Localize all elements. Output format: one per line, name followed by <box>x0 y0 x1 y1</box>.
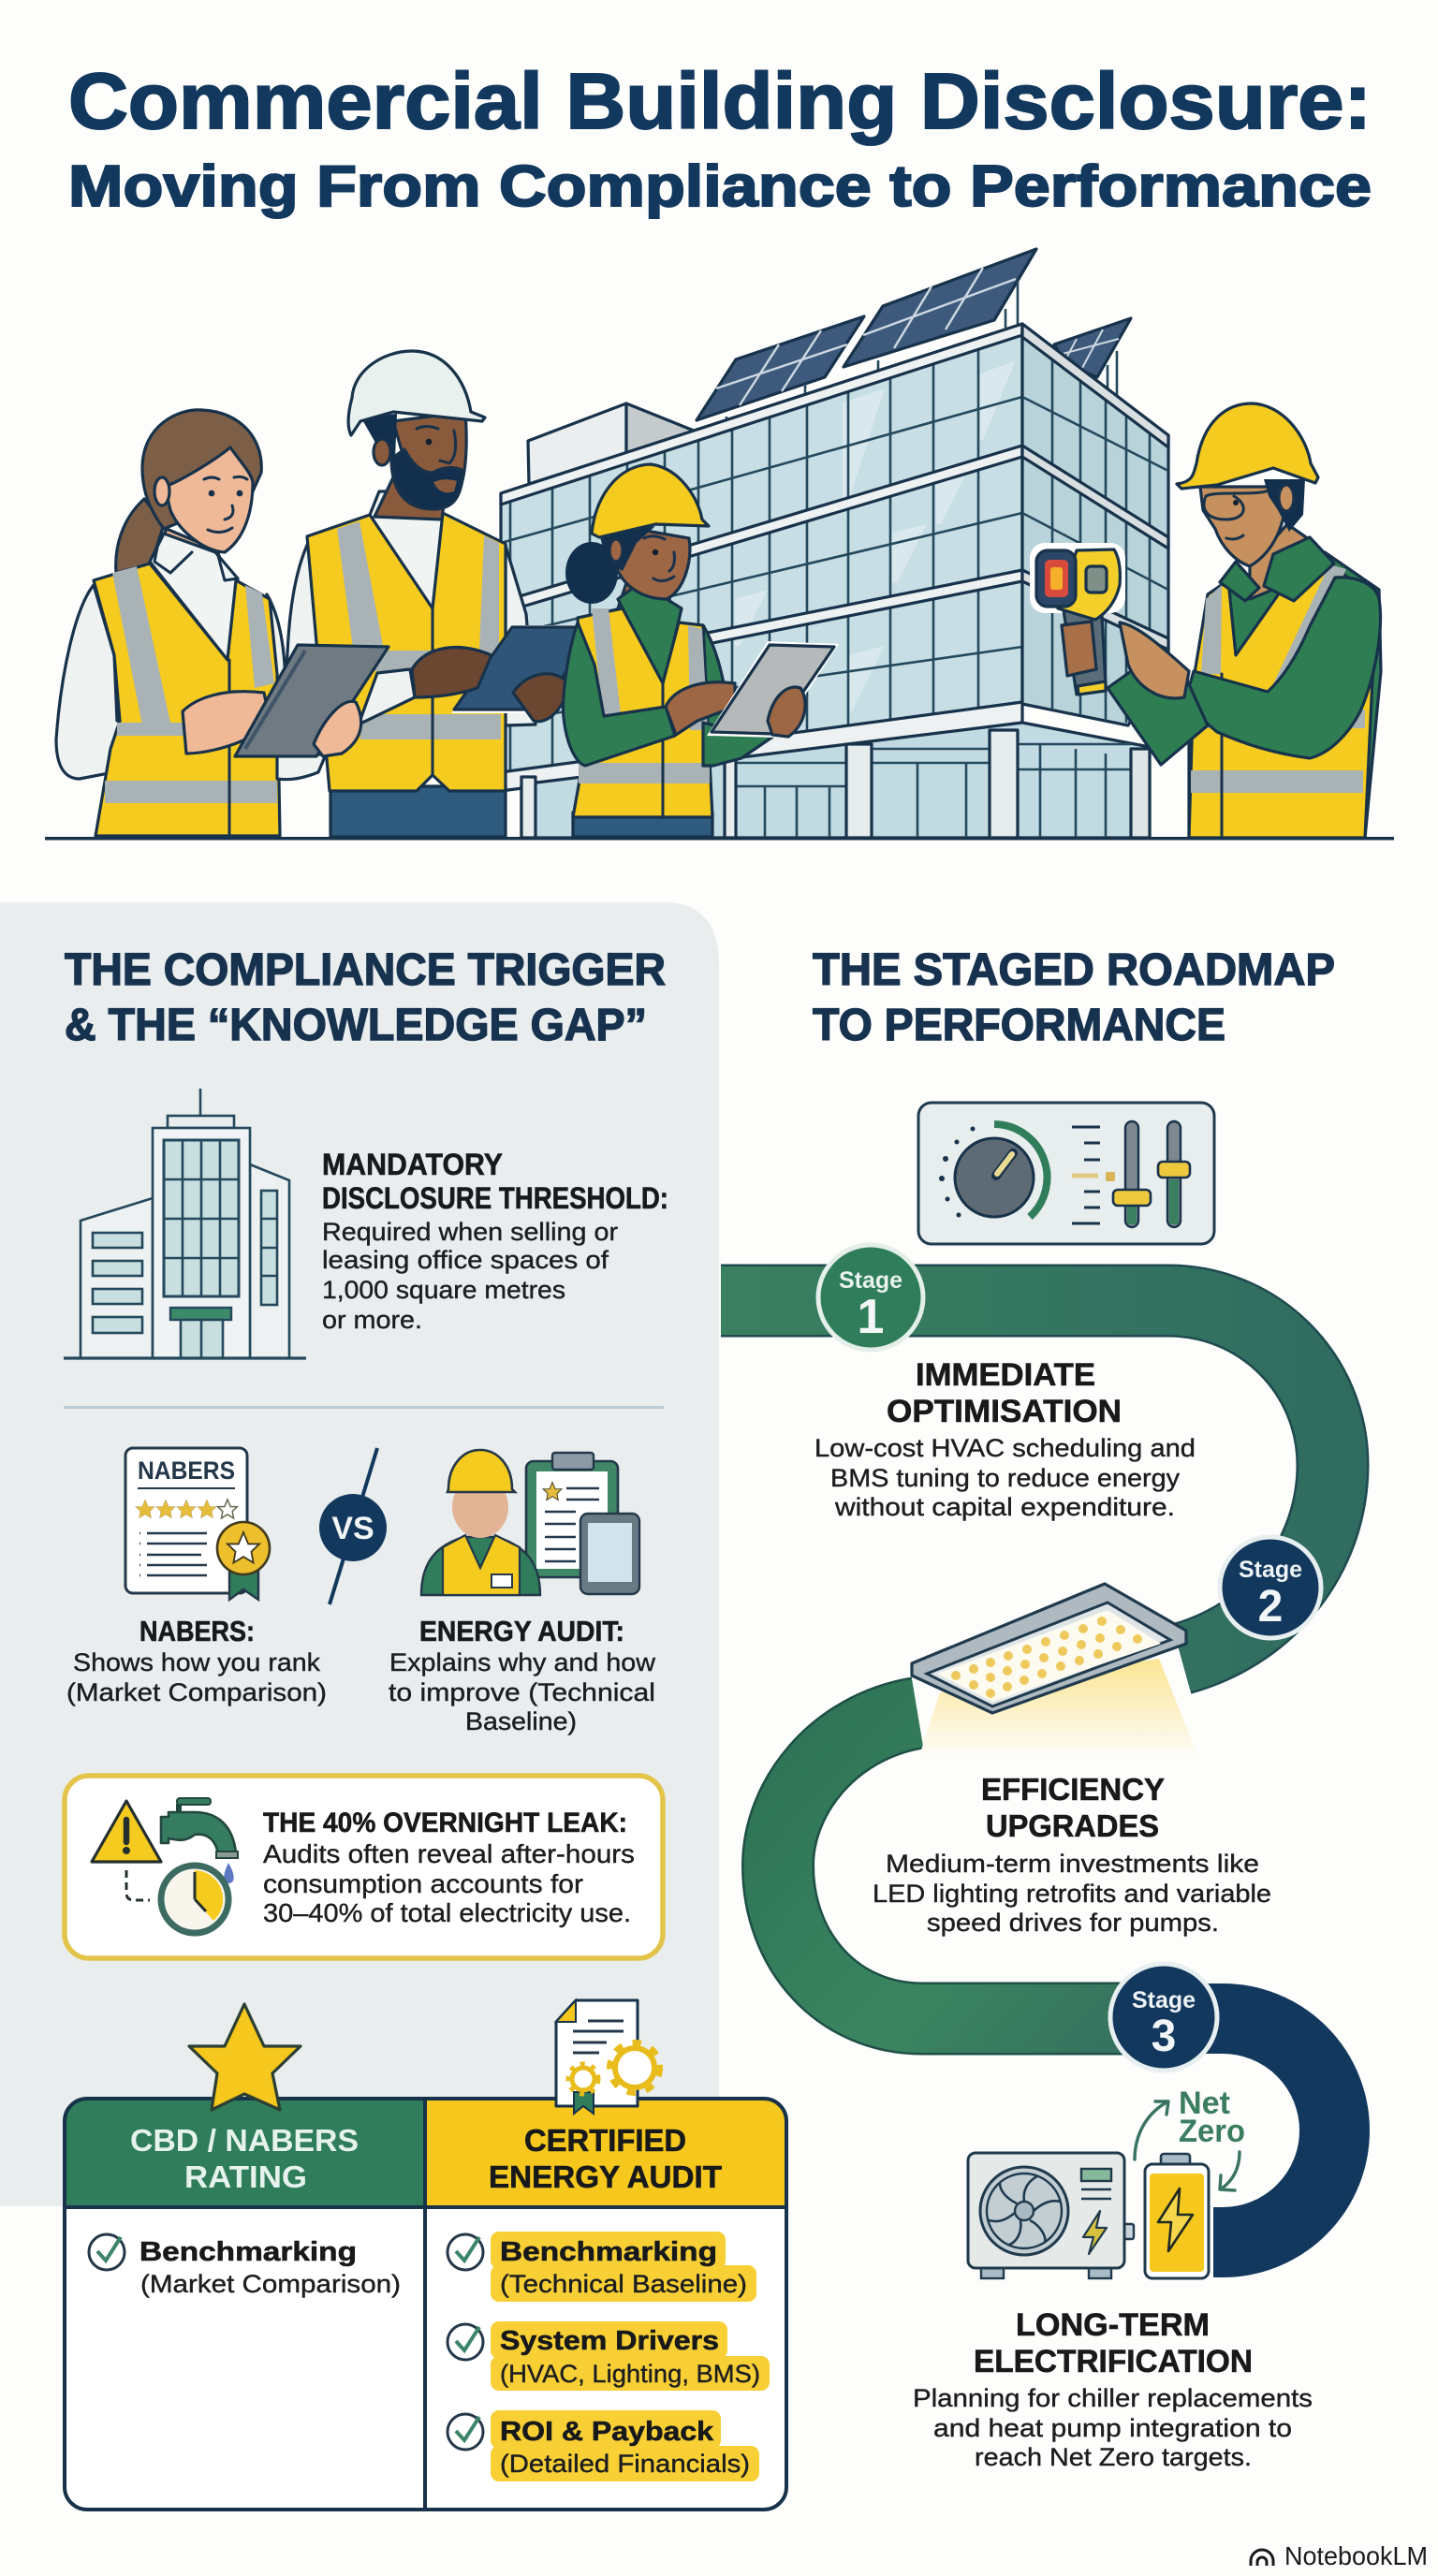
text: overnight leak <box>263 1808 635 1927</box>
icon: stage 2 badge <box>1220 1537 1321 1638</box>
text: long-term electrification: LONG-TERM <box>1016 2307 1210 2343</box>
table header: certified energy audit: CERTIFIED <box>524 2123 686 2158</box>
label: net zero: Net <box>1179 2086 1230 2121</box>
text: NABERS: NABERS: <box>139 1615 255 1647</box>
title: Moving From Compliance to Performance <box>68 154 1372 219</box>
icon: stage 1 badge <box>818 1245 923 1350</box>
icon: stage 3 badge: 3 <box>1152 2012 1176 2061</box>
text: mandatory disclosure threshold <box>322 1148 668 1334</box>
text: energy audit: ENERGY AUDIT: <box>419 1615 624 1647</box>
row: system drivers: System Drivers <box>500 2326 719 2356</box>
table header: certified energy audit: ENERGY AUDIT <box>489 2159 722 2194</box>
label: net zero <box>1179 2086 1245 2149</box>
row: benchmarking market comparison <box>89 2234 401 2298</box>
icon: battery <box>1145 2154 1209 2278</box>
text: energy audit: Baseline) <box>465 1707 577 1735</box>
icon: heat pump <box>968 2153 1134 2278</box>
heading: staged roadmap: TO PERFORMANCE <box>813 1001 1225 1050</box>
heading: compliance trigger <box>65 945 666 1050</box>
person 1: woman with tablet <box>56 410 389 836</box>
building with solar panels <box>501 249 1168 838</box>
title: Commercial Building Disclosure: <box>68 57 1372 145</box>
glass facade side <box>1022 324 1168 725</box>
text: NABERS <box>66 1615 327 1706</box>
rooftop box <box>528 403 698 484</box>
row: benchmarking technical baseline <box>448 2232 756 2302</box>
heading: compliance trigger: & THE “KNOWLEDGE GAP” <box>65 1001 647 1050</box>
text: efficiency upgrades: Medium-term investments like <box>886 1850 1259 1878</box>
icon: NABERS certificate: NABERS <box>138 1456 235 1485</box>
text: immediate optimisation <box>814 1357 1196 1521</box>
text: NABERS: Shows how you rank <box>73 1648 321 1676</box>
table header: CBD / NABERS rating <box>65 2099 425 2207</box>
glass facade front <box>501 324 1022 791</box>
hero illustration <box>45 249 1394 841</box>
icon: stage 2 badge: 2 <box>1258 1582 1283 1632</box>
row: benchmarking technical baseline: (Technical Baseline) <box>500 2270 747 2298</box>
text: mandatory disclosure threshold: DISCLOSURE THRESHOLD: <box>322 1181 668 1215</box>
comparison table <box>65 2000 786 2510</box>
text: mandatory disclosure threshold: leasing office spaces of <box>322 1246 609 1274</box>
text: long-term electrification: and heat pump integration to <box>933 2414 1292 2442</box>
callout: 40% overnight leak <box>65 1776 663 1958</box>
row: system drivers <box>448 2321 770 2391</box>
icon: stage 2 badge: Stage <box>1239 1557 1302 1583</box>
text: long-term electrification: Planning for chiller replacements <box>913 2384 1313 2412</box>
text: efficiency upgrades: LED lighting retrofits and variable <box>873 1880 1271 1908</box>
text: energy audit: Explains why and how <box>389 1648 656 1676</box>
person 4: inspector with thermal camera <box>1030 403 1381 838</box>
icon: warning triangle <box>92 1801 161 1862</box>
person 3: woman with yellow hat <box>564 464 839 837</box>
icon: clock <box>126 1866 228 1933</box>
icon: auditor with clipboard and tablet <box>421 1450 639 1595</box>
label: net zero: Zero <box>1179 2114 1245 2149</box>
ground floor <box>521 723 1150 838</box>
ground line <box>45 837 1394 841</box>
text: immediate optimisation: BMS tuning to reduce energy <box>830 1464 1181 1492</box>
row: ROI and payback <box>448 2410 759 2481</box>
text: long-term electrification: reach Net Zero targets. <box>975 2443 1252 2471</box>
text: immediate optimisation: OPTIMISATION <box>887 1394 1122 1429</box>
text: mandatory disclosure threshold: MANDATORY <box>322 1148 503 1181</box>
panel: compliance trigger background <box>0 902 719 2206</box>
icon: VS divider <box>319 1448 387 1604</box>
text: energy audit: to improve (Technical <box>389 1678 655 1706</box>
text: energy audit <box>389 1615 656 1735</box>
text: efficiency upgrades: UPGRADES <box>986 1808 1159 1843</box>
row: benchmarking market comparison: Benchmarking <box>139 2237 357 2267</box>
icon: stage 1 badge: 1 <box>858 1290 884 1344</box>
icon: LED panel light <box>912 1584 1200 1762</box>
text: efficiency upgrades: speed drives for pumps. <box>927 1909 1219 1937</box>
logo: NotebookLM: NotebookLM <box>1284 2541 1428 2570</box>
text: overnight leak: THE 40% OVERNIGHT LEAK: <box>263 1808 627 1838</box>
icon: star <box>189 2004 301 2110</box>
person 2: man with white hard hat <box>286 351 599 837</box>
table header: certified energy audit <box>425 2099 786 2207</box>
icon: control panel with dial and sliders <box>918 1103 1214 1244</box>
icon: office building <box>64 1089 306 1358</box>
heading: staged roadmap <box>813 945 1335 1050</box>
icon: leaking tap <box>161 1798 238 1883</box>
ribbon: stage 1 to 2 path <box>721 1301 1333 1659</box>
text: long-term electrification <box>913 2307 1313 2471</box>
text: mandatory disclosure threshold: or more. <box>322 1306 422 1334</box>
icon: audit document with gears <box>556 2000 659 2114</box>
ribbon: stage 2 to 3 path <box>778 1713 1164 2018</box>
icon: stage 1 badge: Stage <box>839 1267 902 1294</box>
solar panels <box>697 249 1131 435</box>
text: NABERS: (Market Comparison) <box>66 1678 327 1706</box>
text: immediate optimisation: Low-cost HVAC scheduling and <box>814 1434 1196 1462</box>
icon: stage 3 badge: Stage <box>1132 1987 1196 2013</box>
row: benchmarking market comparison: (Market Comparison) <box>140 2270 401 2298</box>
icon: VS divider: VS <box>331 1511 374 1546</box>
text: overnight leak: consumption accounts for <box>263 1869 583 1898</box>
text: immediate optimisation: without capital expenditure. <box>834 1493 1175 1521</box>
text: mandatory disclosure threshold: 1,000 square metres <box>322 1276 565 1304</box>
row: benchmarking technical baseline: Benchmarking <box>500 2237 717 2267</box>
icon: NABERS certificate <box>125 1448 270 1600</box>
text: long-term electrification: ELECTRIFICATION <box>974 2344 1253 2379</box>
ribbon: stage 3 path <box>1161 2018 1335 2243</box>
row: system drivers: (HVAC, Lighting, BMS) <box>500 2360 760 2388</box>
heading: staged roadmap: THE STAGED ROADMAP <box>813 945 1335 995</box>
row: ROI and payback: ROI & Payback <box>500 2417 714 2447</box>
icon: stage 3 badge <box>1110 1964 1217 2071</box>
text: efficiency upgrades <box>873 1772 1271 1937</box>
text: efficiency upgrades: EFFICIENCY <box>981 1772 1165 1807</box>
title <box>68 57 1372 219</box>
heading: compliance trigger: THE COMPLIANCE TRIGGER <box>65 945 666 995</box>
table header: CBD / NABERS rating: CBD / NABERS <box>130 2123 359 2158</box>
table header: CBD / NABERS rating: RATING <box>184 2159 307 2194</box>
text: overnight leak: 30–40% of total electricity use. <box>263 1898 631 1927</box>
text: mandatory disclosure threshold: Required when selling or <box>322 1218 618 1246</box>
row: ROI and payback: (Detailed Financials) <box>500 2450 750 2478</box>
text: immediate optimisation: IMMEDIATE <box>916 1357 1095 1393</box>
arrows: net zero cycle <box>1135 2101 1240 2190</box>
text: overnight leak: Audits often reveal after-hours <box>263 1839 635 1868</box>
